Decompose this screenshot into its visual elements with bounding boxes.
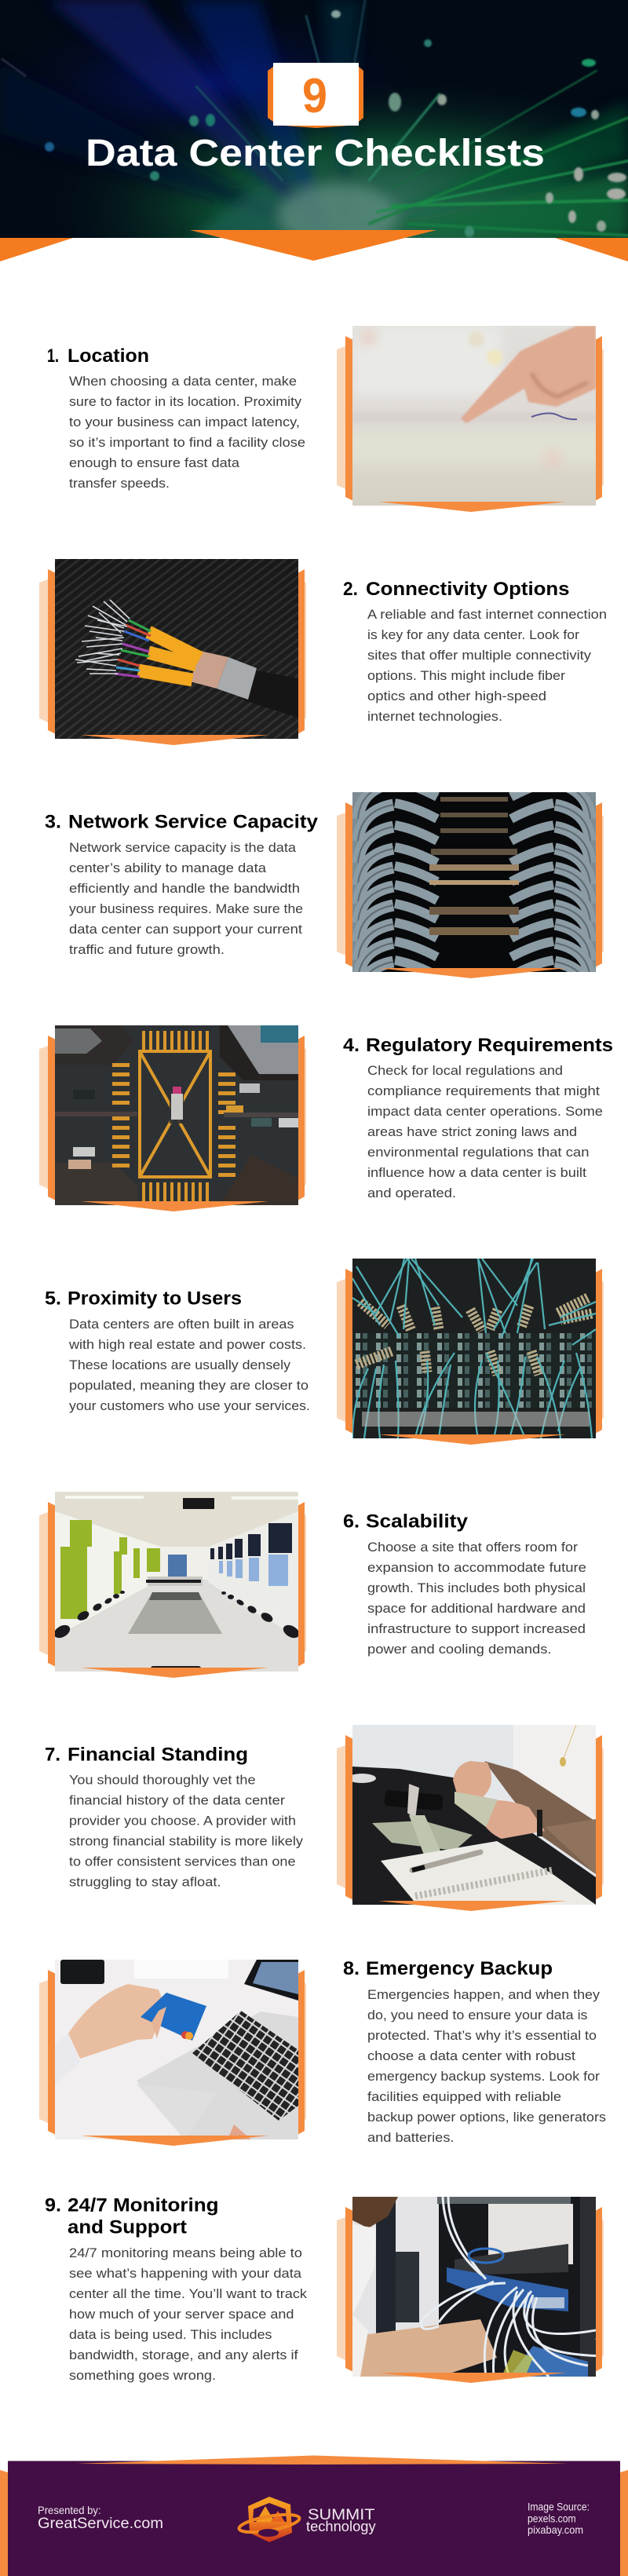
body text: Emergencies happen, and when they (367, 1987, 601, 2002)
logo wordmark: SUMMIT (308, 2507, 375, 2523)
body text: When choosing a data center, make (69, 374, 297, 389)
footer top chevron (76, 2456, 568, 2465)
panel: 9 24/7 Monitoring and Support (45, 2195, 611, 2383)
panel: 8 Emergency Backup (39, 1958, 610, 2146)
body text: data is being used. This includes (69, 2327, 272, 2342)
panel: 5 Proximity to Users (45, 1259, 604, 1445)
heading: 3. (45, 812, 61, 833)
body text: Data centers are often built in areas (69, 1317, 294, 1332)
heading: 6. (343, 1511, 360, 1533)
photo frame with counting money (337, 1725, 604, 1911)
heading: Proximity to Users (68, 1288, 242, 1310)
body text: to your business can impact latency, (69, 415, 300, 429)
footer panel (8, 2461, 620, 2576)
body text: with high real estate and power costs. (68, 1337, 306, 1352)
heading: 7. (45, 1744, 60, 1765)
panel: 4 Regulatory Requirements (39, 1025, 613, 1211)
heading: and Support (68, 2217, 187, 2238)
body text: space for additional hardware and (367, 1601, 586, 1616)
body text: strong financial stability is more likely (69, 1834, 304, 1849)
body text: enough to ensure fast data (69, 455, 240, 470)
panel: 2 Connectivity Options (39, 559, 611, 745)
photo frame with cable arches (337, 781, 604, 998)
body text: transfer speeds. (69, 476, 170, 491)
body text: influence how a data center is built (367, 1165, 586, 1180)
photo frame with conference room (39, 1492, 306, 1678)
orange top-center arrow (190, 230, 436, 261)
number badge (268, 63, 363, 128)
body text: do, you need to ensure your data is (367, 2008, 587, 2022)
body text: how much of your server space and (69, 2307, 294, 2322)
heading: Location (68, 345, 149, 367)
footer orange side right (620, 2470, 628, 2576)
body text: protected. That’s why it’s essential to (367, 2028, 597, 2043)
image source: pixabay.com (528, 2523, 583, 2536)
body text: financial history of the data center (69, 1793, 285, 1808)
body text: see what’s happening with your data (69, 2266, 302, 2281)
body text: center all the time. You’ll want to track (69, 2286, 308, 2301)
body text: growth. This includes both physical (367, 1580, 586, 1595)
body text: to offer consistent services than one (69, 1854, 295, 1869)
panel: 6 Scalability (39, 1492, 590, 1678)
body text: and operated. (367, 1186, 456, 1200)
heading: Network Service Capacity (68, 812, 319, 833)
logo (238, 2497, 376, 2542)
body text: emergency backup systems. Look for (367, 2069, 600, 2084)
body text: sure to factor in its location. Proximity (69, 394, 302, 409)
footer (0, 2456, 628, 2576)
body text: You should thoroughly vet the (69, 1773, 256, 1788)
body text: power and cooling demands. (367, 1642, 551, 1657)
body text: sites that offer multiple connectivity (367, 648, 592, 663)
heading: 24/7 Monitoring (68, 2195, 219, 2216)
body text: center’s ability to manage data (69, 860, 267, 875)
body text: A reliable and fast internet connection (367, 607, 607, 622)
image source: Image Source: (528, 2501, 590, 2513)
body text: environmental regulations that can (367, 1145, 589, 1160)
body text: populated, meaning they are closer to (69, 1378, 309, 1393)
body text: impact data center operations. Some (367, 1104, 603, 1119)
heading: 4. (343, 1035, 360, 1056)
heading: 8. (343, 1958, 360, 1979)
body text: traffic and future growth. (69, 942, 225, 957)
photo frame with finger on map (337, 326, 612, 512)
body text: options. This might include fiber (367, 668, 565, 683)
body text: provider you choose. A provider with (69, 1814, 296, 1829)
presented by: Presented by: (38, 2504, 101, 2516)
panel: 1 Location (47, 326, 612, 512)
footer orange side left (0, 2470, 8, 2576)
heading: 9. (45, 2195, 61, 2216)
title: Data Center Checklists (86, 133, 545, 174)
heading: Regulatory Requirements (366, 1035, 613, 1056)
header banner (0, 0, 628, 261)
heading: Connectivity Options (366, 579, 570, 600)
heading: 2. (343, 579, 358, 600)
body text: efficiently and handle the bandwidth (69, 881, 300, 896)
photo frame with technician and rack (337, 2197, 611, 2383)
panel: 3 Network Service Capacity (45, 781, 604, 998)
body text: and batteries. (367, 2130, 454, 2145)
number badge: 9 (302, 69, 327, 123)
body text: 24/7 monitoring means being able to (69, 2245, 302, 2260)
body text: your business requires. Make sure the (69, 901, 303, 916)
body text: your customers who use your services. (69, 1398, 310, 1413)
body text: facilities equipped with reliable (367, 2089, 561, 2104)
body text: Check for local regulations and (367, 1063, 563, 1078)
photo frame with teal fiber patch panel (337, 1259, 604, 1445)
logo wordmark: technology (306, 2518, 376, 2534)
header photo: fiber optics (0, 0, 628, 238)
body text: Choose a site that offers room for (367, 1540, 578, 1555)
heading: Scalability (366, 1511, 469, 1533)
body text: bandwidth, storage, and any alerts if (69, 2348, 298, 2362)
image source: pexels.com (528, 2512, 576, 2524)
body text: choose a data center with robust (367, 2048, 575, 2063)
panel: 7 Financial Standing (45, 1725, 604, 1911)
body text: internet technologies. (367, 709, 502, 724)
heading: Financial Standing (68, 1744, 248, 1765)
body text: areas have strict zoning laws and (367, 1124, 577, 1139)
heading: 5. (45, 1288, 61, 1310)
body text: something goes wrong. (69, 2368, 216, 2383)
body text: expansion to accommodate future (367, 1560, 586, 1575)
heading: Emergency Backup (366, 1958, 553, 1979)
body text: is key for any data center. Look for (367, 627, 579, 642)
presented by: GreatService.com (38, 2515, 163, 2532)
body text: These locations are usually densely (69, 1357, 291, 1372)
orange left corner (0, 238, 73, 261)
heading: 1. (47, 345, 59, 367)
body text: so it’s important to find a facility close (69, 435, 305, 450)
photo frame with fiber cable (39, 559, 306, 745)
logo icon (238, 2497, 301, 2542)
photo frame with credit card and laptop (39, 1960, 306, 2146)
body text: optics and other high-speed (367, 689, 546, 703)
body text: Network service capacity is the data (69, 840, 297, 855)
body text: struggling to stay afloat. (69, 1875, 221, 1890)
body text: infrastructure to support increased (367, 1621, 586, 1636)
body text: compliance requirements that might (367, 1083, 600, 1098)
body text: backup power options, like generators (367, 2110, 606, 2125)
body text: data center can support your current (69, 922, 302, 937)
photo frame with aerial road (39, 1025, 306, 1211)
orange right corner (555, 238, 628, 261)
